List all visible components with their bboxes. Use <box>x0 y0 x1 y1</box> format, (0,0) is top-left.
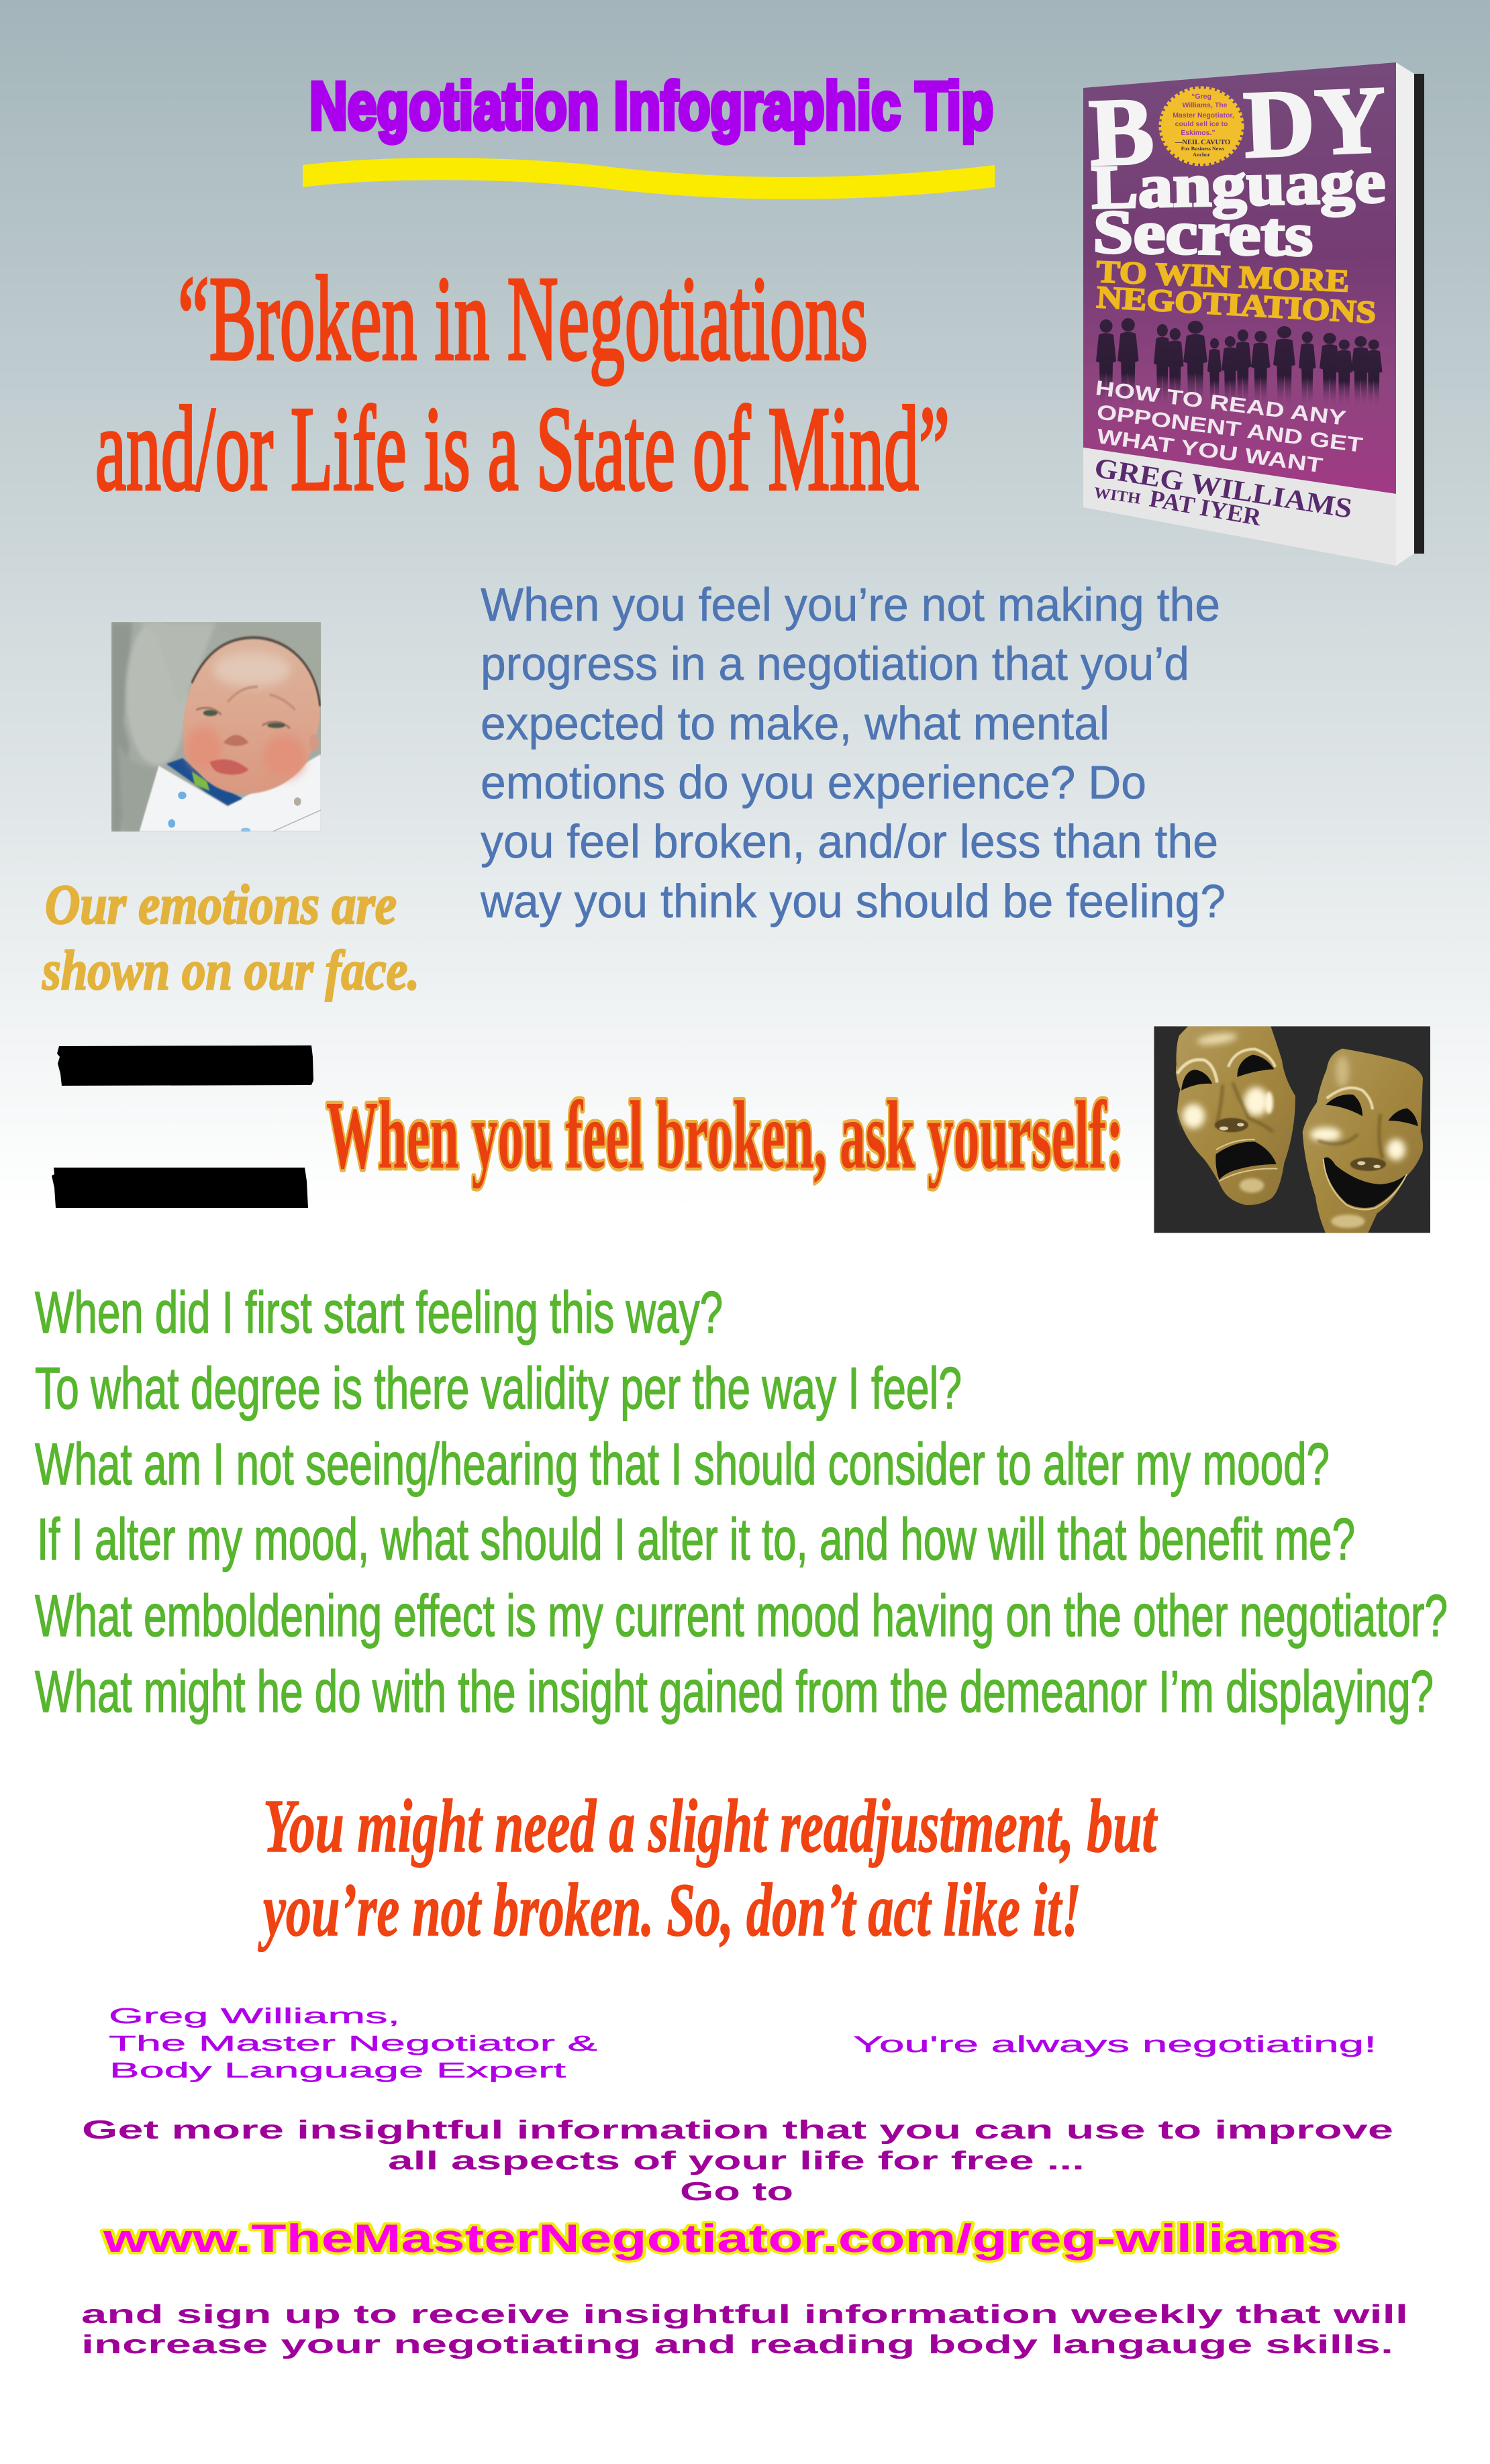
title: Negotiation Infographic Tip <box>309 68 993 144</box>
body paragraph <box>480 578 1226 927</box>
credit line 2: The Master Negotiator & <box>109 2031 597 2055</box>
paragraph line 6: way you think you should be feeling? <box>480 875 1226 927</box>
book title: B <box>1087 77 1156 186</box>
photo: crying baby <box>111 619 321 832</box>
book authors: GREG WILLIAMS <box>1092 452 1354 525</box>
book authors: PAT IYER <box>1148 484 1264 531</box>
paragraph line 5: you feel broken, and/or less than the <box>481 815 1218 868</box>
book seal: Fox Business News <box>1181 146 1224 152</box>
photo: theatre masks <box>1154 1026 1430 1233</box>
book subtitle <box>1094 376 1364 477</box>
redaction bar bottom <box>52 1168 308 1208</box>
book seal: —NEIL CAVUTO <box>1175 139 1230 146</box>
book seal: could sell ice to <box>1175 120 1228 128</box>
paragraph line 2: progress in a negotiation that you’d <box>481 637 1189 690</box>
headline line 1: “Broken in Negotiations <box>178 252 868 385</box>
book seal: Eskimos.” <box>1181 129 1215 137</box>
book authors: WITH <box>1093 484 1142 507</box>
book title <box>1087 66 1388 330</box>
credit line 1: Greg Williams, <box>109 2004 400 2028</box>
sign up line 2: increase your negotiating and reading body langauge skills. <box>81 2330 1393 2359</box>
book subtitle: HOW TO READ ANY <box>1094 376 1348 430</box>
author credit <box>109 2004 597 2082</box>
caption: our emotions <box>42 874 419 1002</box>
paragraph line 4: emotions do you experience? Do <box>481 756 1146 809</box>
book spine <box>1414 74 1424 554</box>
book front cover <box>1083 62 1396 494</box>
red conclusion <box>258 1784 1158 1952</box>
book title: DY <box>1242 66 1388 178</box>
question 2: To what degree is there validity per the way I feel? <box>35 1355 962 1421</box>
book subtitle: OPPONENT AND GET <box>1095 400 1364 457</box>
book seal: Master Negotiator, <box>1173 111 1234 119</box>
credit line 3: Body Language Expert <box>109 2058 566 2082</box>
question 1: When did I first start feeling this way? <box>35 1279 723 1345</box>
book cover <box>1083 62 1424 566</box>
comedy mask <box>1303 1049 1423 1233</box>
book subtitle: WHAT YOU WANT <box>1095 424 1324 477</box>
redaction bar top <box>57 1045 313 1086</box>
headline quote <box>95 252 950 515</box>
website url: www.TheMasterNegotiator.com/greg-williams <box>103 2216 1339 2261</box>
book seal: Williams, The <box>1182 101 1228 109</box>
book silhouettes <box>1096 318 1383 407</box>
book seal: “Greg <box>1191 93 1211 101</box>
cta line 3: Go to <box>680 2177 793 2206</box>
book title: Secrets <box>1093 197 1313 269</box>
book seal: Anchor <box>1193 152 1210 158</box>
call to action <box>82 2116 1393 2206</box>
tragedy mask <box>1176 1026 1295 1205</box>
sign up text <box>81 2300 1408 2359</box>
yellow swoosh underline <box>303 158 995 199</box>
paragraph line 1: When you feel you’re not making the <box>481 578 1220 631</box>
slogan: You're always negotiating! <box>853 2032 1377 2057</box>
book title: Language <box>1091 147 1386 222</box>
book seal <box>1161 89 1242 164</box>
book title: NEGOTIATIONS <box>1095 280 1377 330</box>
green question list <box>35 1279 1448 1725</box>
book title: TO WIN MORE <box>1096 254 1350 299</box>
conclusion line 2: you’re not broken. So, don’t act like it! <box>258 1868 1081 1952</box>
book page block <box>1396 62 1414 566</box>
cta line 1: Get more insightful information that you can use to improve <box>82 2116 1393 2145</box>
caption line 2: shown on our face. <box>42 939 419 1002</box>
sign up line 1: and sign up to receive insightful information weekly that will <box>81 2300 1408 2329</box>
paragraph line 3: expected to make, what mental <box>481 697 1109 750</box>
cta line 2: all aspects of your life for free ... <box>388 2147 1085 2175</box>
caption line 1: Our emotions are <box>45 874 397 936</box>
book white strip <box>1083 448 1396 566</box>
